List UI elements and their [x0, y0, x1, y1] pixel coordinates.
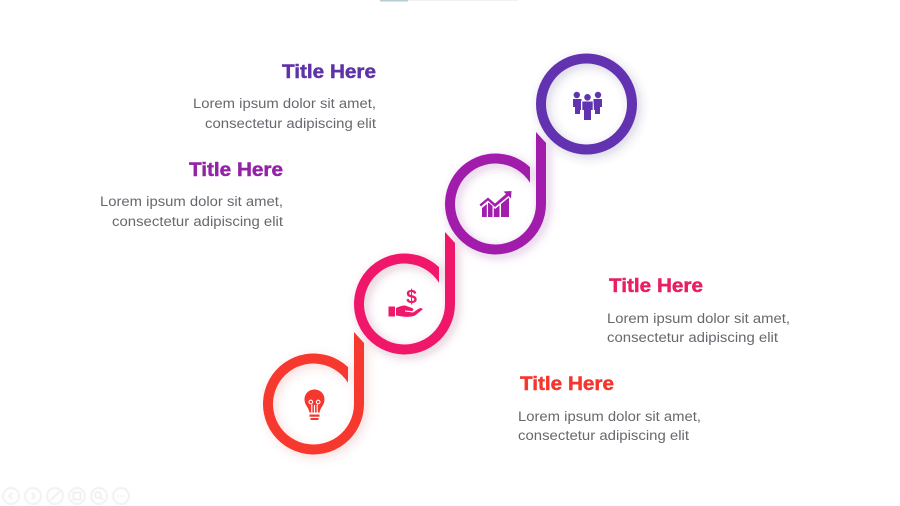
- text block: step 1: consectetur adipiscing elit: [205, 116, 376, 131]
- text block: step 3: Title Here: [609, 276, 703, 297]
- ring: step 1 purple: [541, 58, 632, 150]
- icon: light bulb: [304, 390, 324, 420]
- text block: step 4: [518, 374, 701, 443]
- text block: step 1: Lorem ipsum dolor sit amet,: [193, 96, 376, 111]
- text block: step 1: Title Here: [282, 62, 376, 83]
- text block: step 1: [193, 62, 376, 131]
- icon: people: [573, 92, 602, 120]
- text block: step 2: Lorem ipsum dolor sit amet,: [100, 194, 283, 209]
- text block: step 2: consectetur adipiscing elit: [112, 214, 283, 229]
- text block: step 3: [607, 276, 790, 345]
- text block: step 4: consectetur adipiscing elit: [518, 428, 689, 443]
- text block: step 2: [100, 160, 283, 229]
- top scrollbar remnant: [380, 0, 518, 2]
- text block: step 4: Title Here: [520, 374, 614, 395]
- text block: step 3: consectetur adipiscing elit: [607, 330, 778, 345]
- slideshow toolbar icons: [3, 488, 129, 504]
- icon: growth chart: [480, 191, 512, 217]
- connected ring: step 2 magenta: [445, 132, 546, 254]
- text block: step 4: Lorem ipsum dolor sit amet,: [518, 409, 701, 424]
- icon: hand with dollar: $: [406, 286, 417, 308]
- connected ring: step 3 pink: [354, 232, 455, 354]
- connected ring: step 4 red: [263, 332, 364, 454]
- text block: step 2: Title Here: [189, 160, 283, 181]
- text block: step 3: Lorem ipsum dolor sit amet,: [607, 311, 790, 326]
- icon: hand with dollar: [388, 286, 423, 317]
